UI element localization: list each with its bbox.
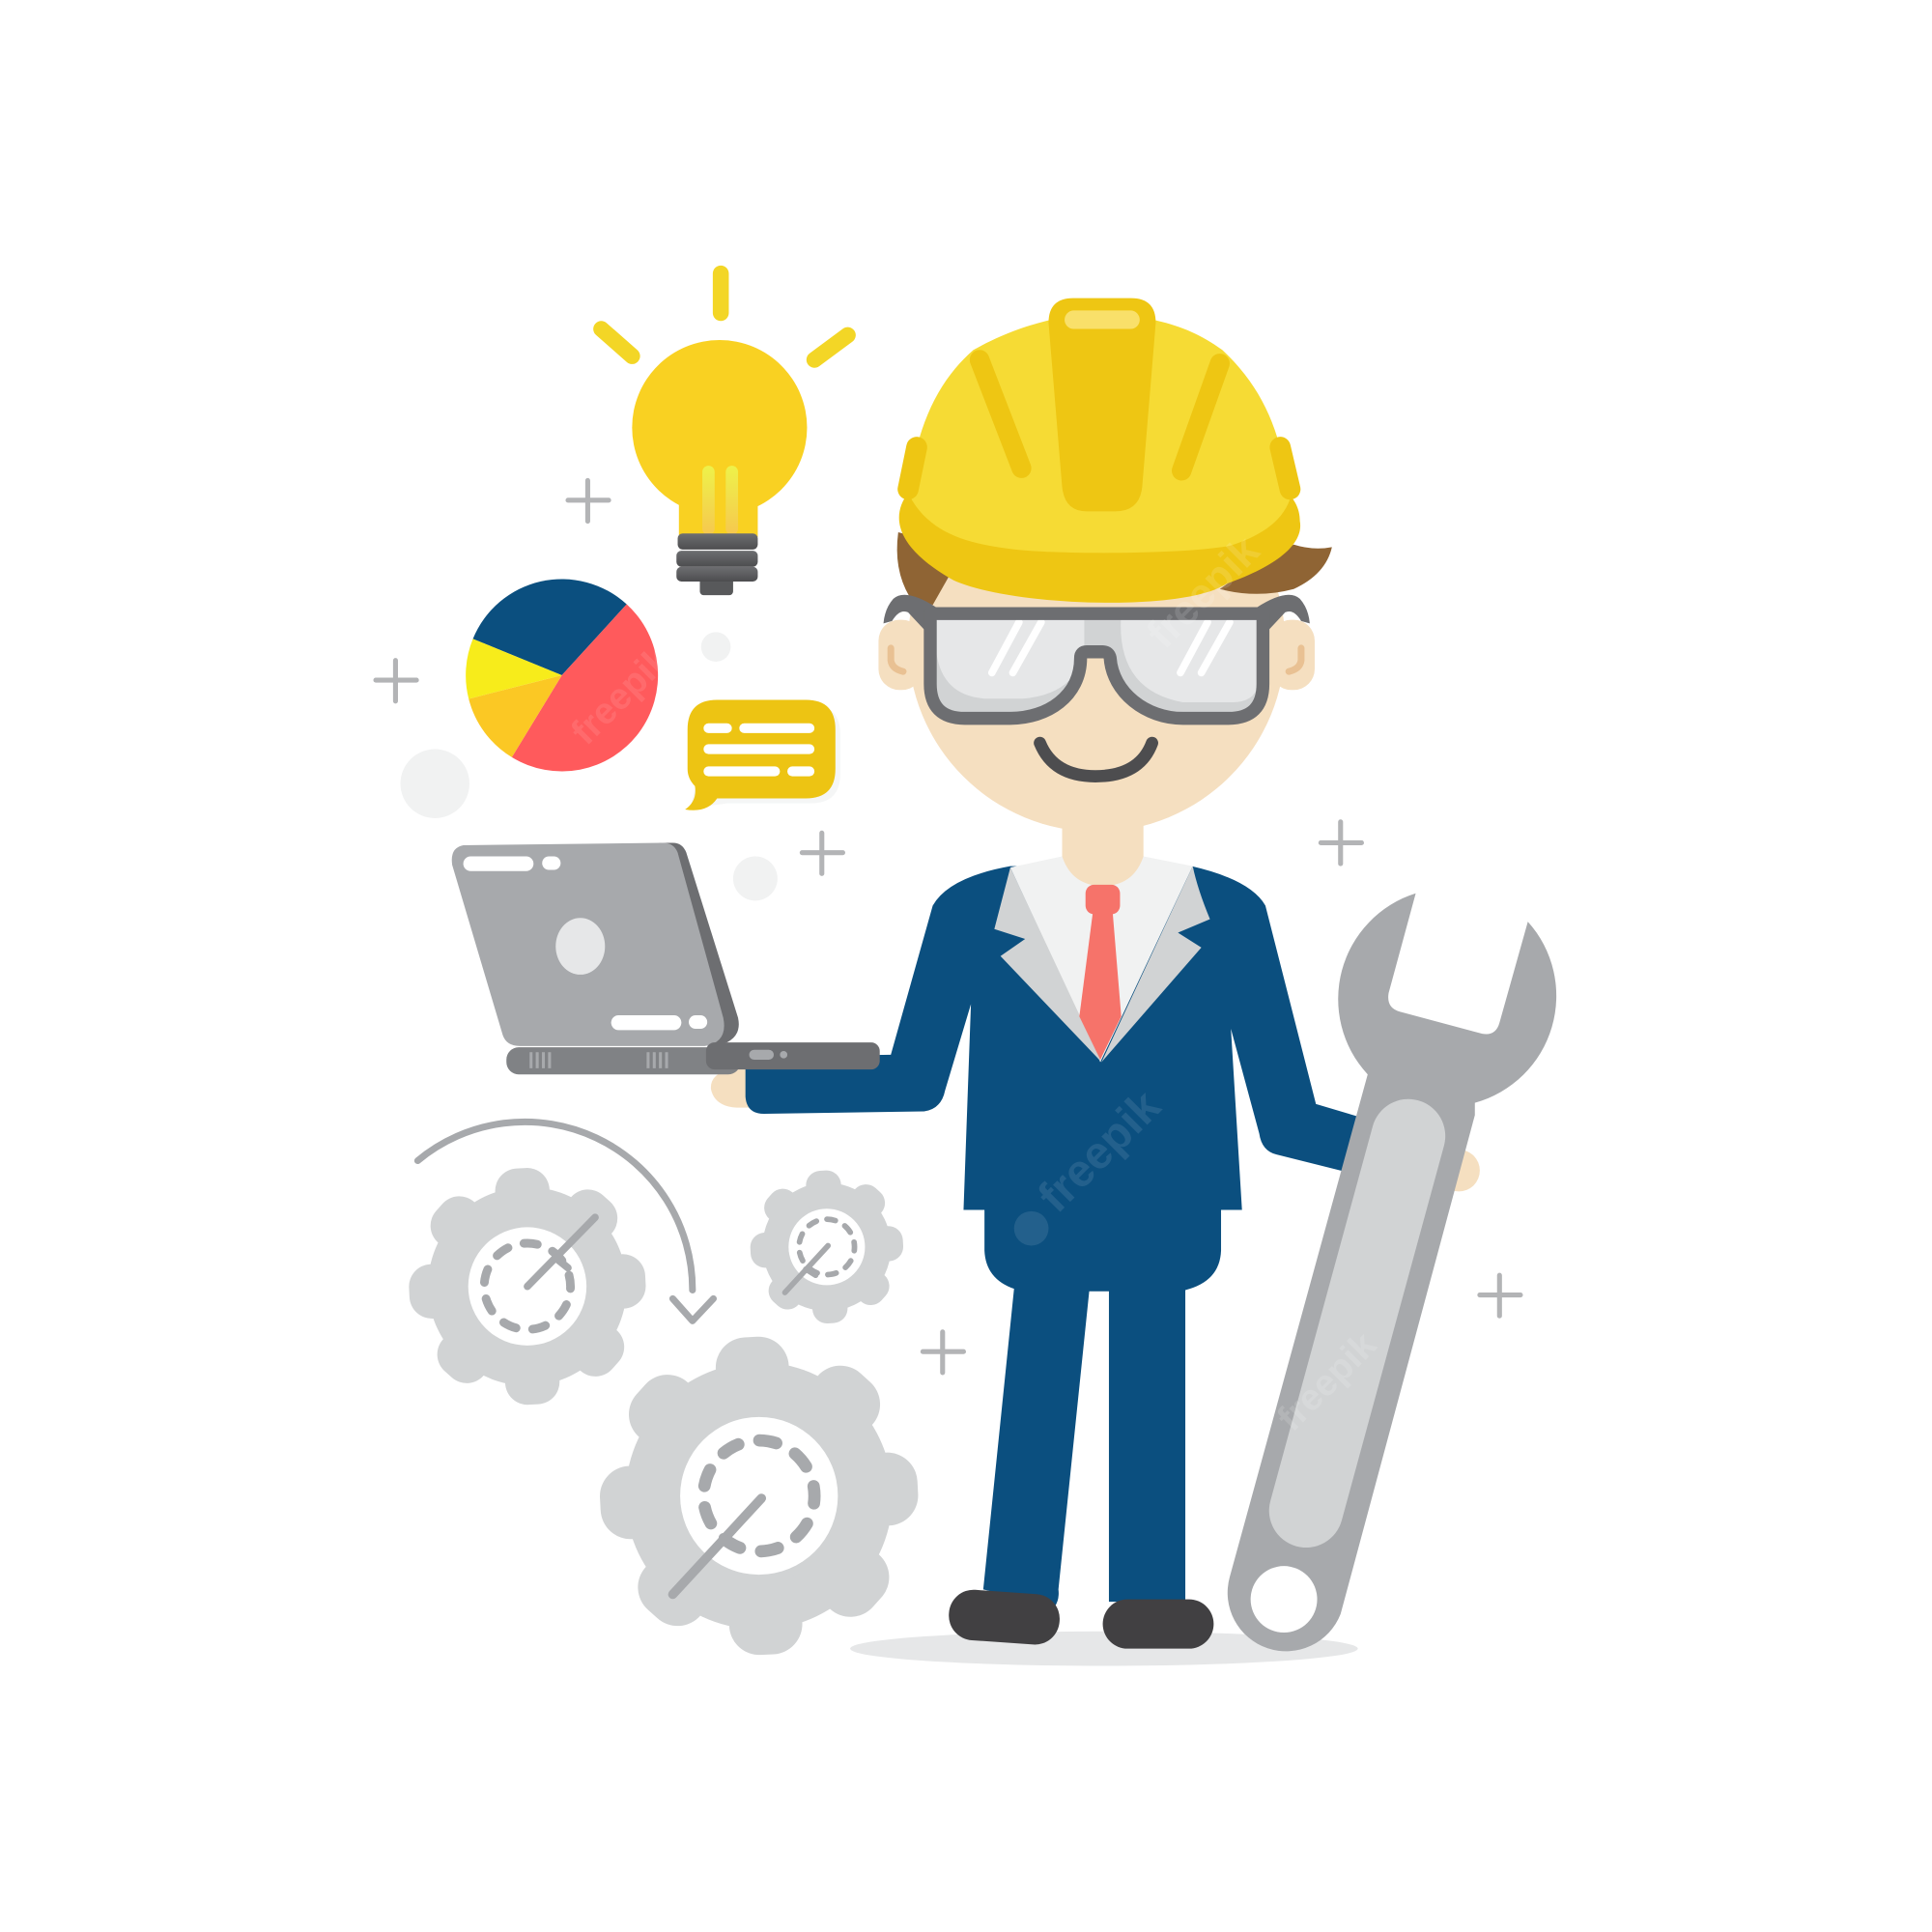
hard hat [899,298,1300,658]
icon: giant wrench: freepik [1269,1323,1385,1439]
mouth [1040,743,1152,777]
character: engineer [746,298,1480,1649]
icon: small gear [747,1167,907,1327]
ground shadow [850,1632,1358,1665]
icon: laptop [452,842,880,1074]
icon: light bulb [601,273,848,595]
pie chart: freepik [563,638,679,753]
head [878,455,1315,832]
necktie [1079,885,1122,1060]
icon: big gear bottom [592,1329,926,1662]
decorative light circles [401,632,778,900]
left hand [711,1069,754,1108]
plus decorations [376,480,1520,1373]
shirt collar [1010,856,1193,1062]
hard hat: freepik [1138,526,1269,658]
suit: freepik [1029,1080,1171,1222]
jacket lapels [994,867,1210,1062]
hair [897,532,1332,605]
neck [1062,813,1144,886]
right hand [1438,1150,1480,1191]
icon: large gear top left [403,1162,652,1410]
shoes [948,1588,1213,1649]
icon: giant wrench [1228,894,1556,1651]
safety glasses [884,595,1310,719]
suit [746,867,1361,1606]
icon: speech bubble [685,699,840,810]
pie chart [466,579,679,771]
arrow: curved rotation arrow [417,1122,714,1321]
